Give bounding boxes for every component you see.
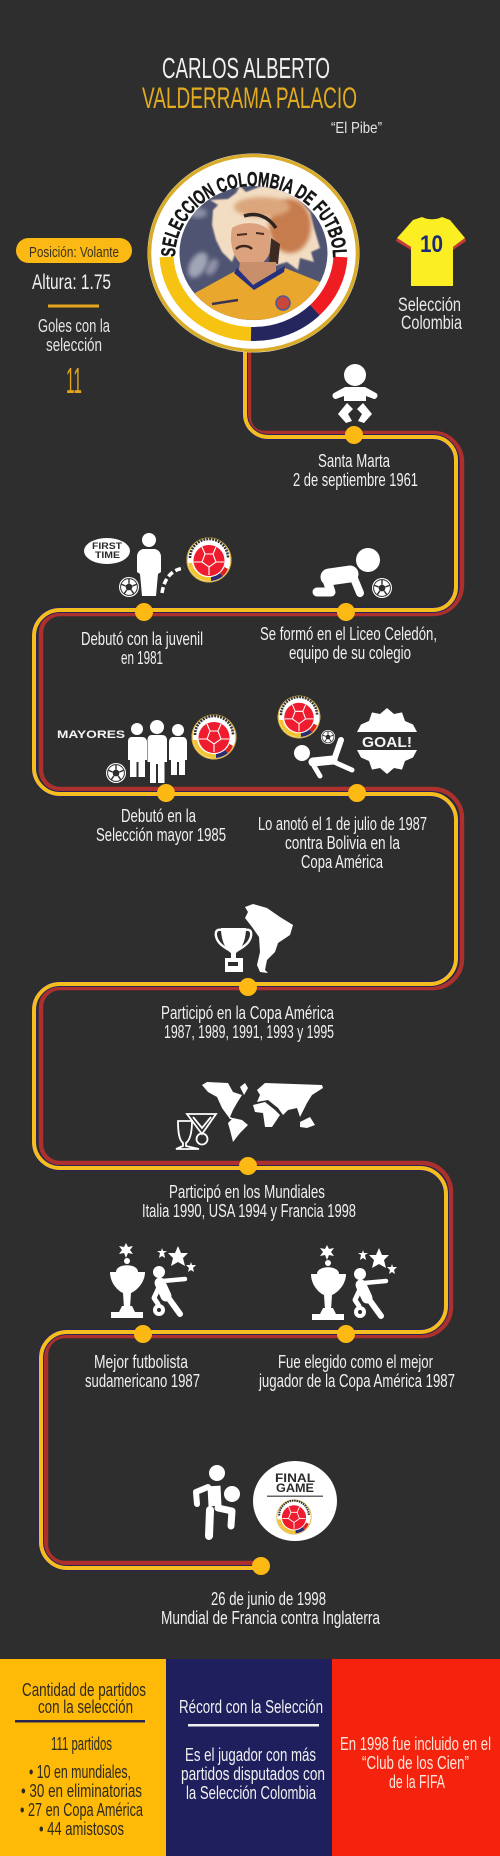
text: goal: Copa América (301, 852, 384, 872)
title: CARLOS ALBERTO (162, 53, 330, 85)
panel: matches with the national team: • 27 en Copa América (20, 1800, 144, 1820)
icon: seniors debut: MAYORES (57, 729, 125, 741)
icon: seniors debut (57, 714, 236, 783)
team label: Selección (398, 295, 461, 316)
icon: jersey (396, 217, 466, 286)
text: 11 (66, 360, 82, 401)
text: birth (293, 451, 418, 490)
panel: record with the national team (166, 1659, 332, 1856)
panel: Club de los Cien (332, 1659, 500, 1856)
icon: jersey: 10 (420, 231, 443, 258)
panel: matches with the national team: • 30 en eliminatorias (21, 1781, 142, 1801)
icon: best South American player (110, 1243, 196, 1318)
text: school: equipo de su colegio (289, 643, 411, 663)
text: youth debut (81, 629, 203, 668)
icon: baby (333, 364, 377, 423)
icon: crawling baby (317, 548, 392, 598)
icon: final game badge: GAME (276, 1481, 314, 1495)
icon: trophy and South America (216, 904, 293, 973)
icon: goal against Bolivia: GOAL! (362, 734, 412, 751)
team label (398, 295, 462, 334)
text: youth debut: en 1981 (121, 648, 163, 668)
text: school: Se formó en el Liceo Celedón, (260, 624, 437, 644)
panel: matches with the national team: 111 partidos (51, 1734, 112, 1754)
text: World Cups (142, 1182, 356, 1221)
icon: first time debut (84, 533, 232, 597)
text: birth: Santa Marta (318, 451, 391, 471)
text: goal: contra Bolivia en la (285, 833, 401, 853)
text: best player Copa America: Fue elegido como el mejor (278, 1352, 433, 1372)
text: World Cups: Italia 1990, USA 1994 y Francia 1998 (142, 1201, 356, 1221)
team label: Colombia (401, 313, 462, 334)
text: seniors debut: Debutó en la (121, 806, 197, 826)
text: World Cups: Participó en los Mundiales (169, 1182, 325, 1202)
timeline path (34, 352, 462, 1568)
panel: matches with the national team: Cantidad de partidos (22, 1680, 146, 1700)
badge: portrait crest (148, 154, 360, 352)
panel: matches with the national team (0, 1659, 166, 1856)
panel: Club de los Cien: de la FIFA (389, 1772, 445, 1792)
text: Copa America: 1987, 1989, 1991, 1993 y 1995 (164, 1022, 334, 1042)
text: best South American: Mejor futbolista (94, 1352, 189, 1372)
text: best South American: sudamericano 1987 (85, 1371, 200, 1391)
icon: first time debut: FIRST (92, 541, 123, 551)
text: seniors debut: Selección mayor 1985 (96, 825, 226, 845)
text: Copa America: Participó en la Copa América (161, 1003, 335, 1023)
icon: first time debut: TIME (95, 550, 120, 560)
text: last match: 26 de junio de 1998 (211, 1589, 326, 1609)
text: best player Copa America (258, 1352, 455, 1391)
title (142, 53, 357, 115)
goals label: Goles con la (38, 316, 111, 336)
panel: record with the national team: Es el jugador con más (185, 1745, 316, 1765)
text: seniors debut (96, 806, 226, 845)
goals label (38, 316, 111, 355)
text: last match (161, 1589, 381, 1628)
panel: record with the national team: partidos disputados con (181, 1764, 325, 1784)
position pill: Posición: Volante (29, 244, 119, 261)
icon: final game badge: FINAL (275, 1471, 315, 1485)
icon: goal against Bolivia (278, 696, 417, 776)
position pill (16, 238, 132, 263)
panel: record with the national team: la Selección Colombia (186, 1783, 317, 1803)
title: VALDERRAMA PALACIO (142, 82, 357, 115)
text: goal (258, 814, 427, 872)
icon: player juggling ball (196, 1465, 240, 1536)
text: birth: 2 de septiembre 1961 (293, 470, 418, 490)
text: best South American (85, 1352, 200, 1391)
timeline nodes (134, 426, 366, 1575)
text: school (260, 624, 437, 663)
icon: best player Copa America (311, 1245, 397, 1320)
panel: matches with the national team: con la selección (38, 1697, 133, 1717)
text: goal: Lo anotó el 1 de julio de 1987 (258, 814, 427, 834)
badge: portrait crest: SELECCION COLOMBIA DE FUTBOL (161, 172, 347, 258)
text: Copa America (161, 1003, 335, 1042)
height: Altura: 1.75 (32, 271, 111, 294)
goals label: selección (46, 335, 102, 355)
panel: matches with the national team: • 44 amistosos (39, 1819, 124, 1839)
text: youth debut: Debutó con la juvenil (81, 629, 203, 649)
panel: record with the national team: Récord con la Selección (179, 1697, 323, 1717)
portrait illustration (180, 186, 328, 320)
icon: world map and trophy (176, 1082, 323, 1149)
nickname: “El Pibe” (331, 120, 382, 137)
text: last match: Mundial de Francia contra Inglaterra (161, 1608, 381, 1628)
icon: final game badge (253, 1461, 337, 1541)
panel: matches with the national team: • 10 en mundiales, (29, 1762, 131, 1782)
